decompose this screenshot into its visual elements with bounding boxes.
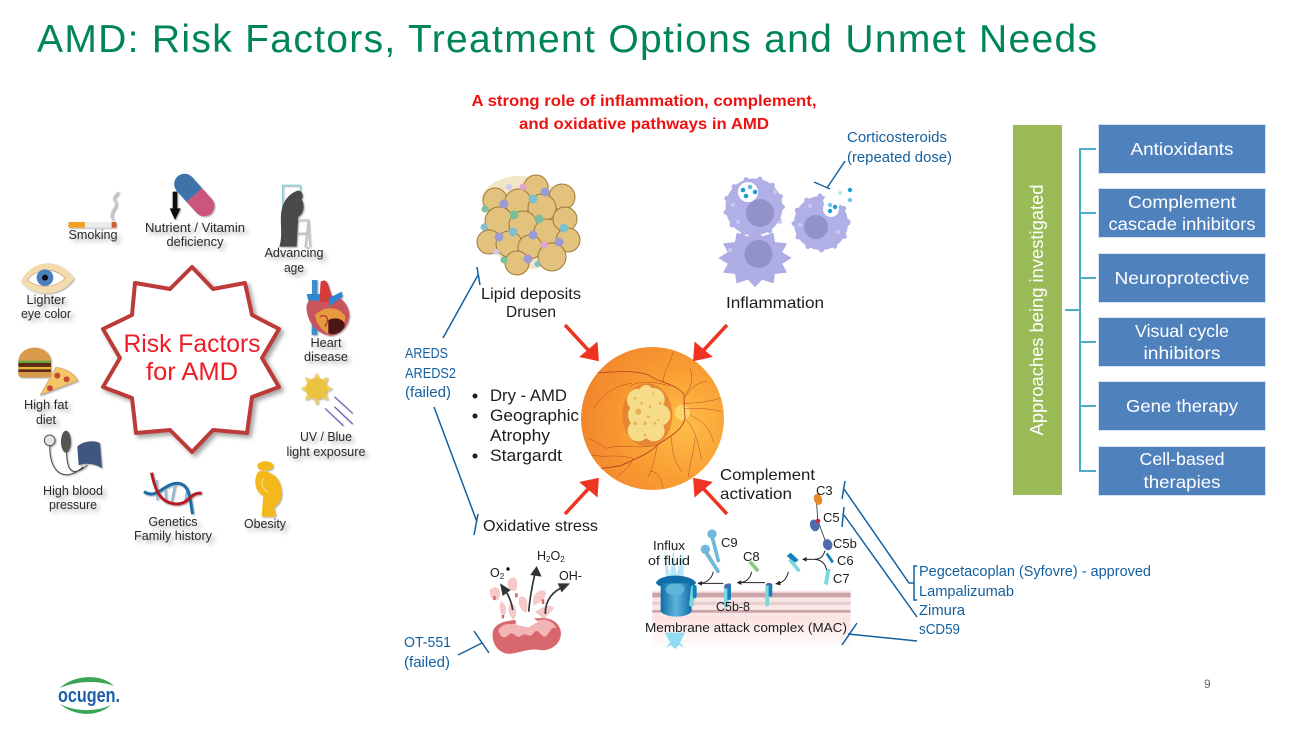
inhibitor lines: complement targets — [842, 481, 917, 645]
arrow: oxidative stress to retina — [565, 480, 597, 514]
arrow: drusen to retina — [565, 325, 597, 359]
label: complement therapies: sCD59 — [919, 622, 960, 638]
icon: cigarette — [68, 192, 118, 228]
label: smoking: Smoking — [68, 228, 118, 242]
arrow: inflammation to retina — [695, 325, 727, 359]
label: genetics family history: Genetics — [148, 515, 198, 529]
box: complement cascade inhibitors — [1098, 188, 1266, 238]
label: high blood pressure — [43, 484, 103, 512]
box: cell-based therapies — [1098, 446, 1266, 496]
inhibitor line: OT-551 — [458, 631, 489, 655]
label: complement activation: activation — [720, 486, 792, 503]
panel: central AMD pathway diagram — [404, 130, 1151, 671]
illustration: lipid drusen cluster — [477, 175, 580, 275]
label: corticosteroids: Corticosteroids — [847, 130, 947, 146]
label: high fat diet — [24, 398, 69, 427]
diagram: complement cascade and membrane attack complex: C5b-8 — [716, 599, 750, 614]
label: reactive oxygen species: 2 — [500, 572, 505, 581]
label: lipid deposits drusen — [481, 286, 581, 321]
heading bar: approaches — [1013, 125, 1062, 495]
heading bar: approaches: Approaches being investigated — [1027, 185, 1047, 435]
box: visual cycle inhibitors — [1098, 318, 1266, 366]
diagram: complement cascade and membrane attack complex: of fluid — [648, 553, 690, 568]
icon: elderly person with walker — [279, 185, 310, 247]
icon: eye — [21, 263, 74, 293]
label: oxidative stress: Oxidative stress — [483, 518, 598, 535]
label: genetics family history — [134, 515, 213, 543]
bullet list: conditions: Stargardt — [490, 446, 562, 465]
label: lighter eye color: eye color — [21, 307, 71, 321]
label: high fat diet: High fat — [24, 398, 69, 412]
label: advancing age: Advancing — [264, 246, 324, 260]
logo: ocugen — [58, 677, 120, 714]
label: heart disease — [304, 336, 348, 364]
bullet list: conditions: Geographic — [490, 406, 580, 425]
diagram: complement cascade and membrane attack complex: C5b — [833, 536, 857, 551]
label: reactive oxygen species — [490, 549, 582, 583]
inhibitor line: corticosteroids — [814, 161, 845, 189]
label: advancing age — [264, 246, 324, 275]
panel: risk factors for AMD — [18, 170, 366, 543]
subtitle: role of inflammation — [472, 93, 816, 133]
subtitle: role of inflammation: A strong role of inflammation, complement, — [472, 93, 816, 110]
box: visual cycle inhibitors: Visual cycle — [1135, 321, 1229, 341]
box: visual cycle inhibitors: inhibitors — [1144, 343, 1221, 363]
label: heart disease: disease — [304, 350, 348, 364]
diagram: complement cascade and membrane attack complex: C3 — [816, 483, 833, 498]
label: UV / blue light exposure — [286, 430, 366, 459]
arrow: complement to retina — [695, 480, 727, 514]
diagram: complement cascade and membrane attack complex: Influx — [653, 538, 686, 553]
box: neuroprotective — [1098, 254, 1266, 302]
connector bracket — [1065, 149, 1096, 471]
label: high fat diet: diet — [36, 413, 57, 427]
label: high blood pressure: pressure — [49, 498, 97, 512]
diagram: complement cascade and membrane attack complex: C9 — [721, 535, 738, 550]
label: reactive oxygen species: O — [550, 549, 560, 563]
diagram: complement cascade and membrane attack complex: C6 — [837, 553, 854, 568]
label: UV / blue light exposure: light exposure — [286, 445, 366, 459]
box: antioxidants: Antioxidants — [1130, 139, 1234, 159]
logo: ocugen: ocugen. — [58, 685, 120, 707]
label: high blood pressure: High blood — [43, 484, 103, 498]
label: complement therapies: Lampalizumab — [919, 584, 1014, 600]
label: reactive oxygen species: 2 — [546, 555, 551, 564]
inhibitor line: AREDS to drusen — [443, 267, 480, 338]
label: nutrient deficiency: Nutrient / Vitamin — [145, 221, 245, 235]
title: AMD: Risk Factors, Treatment Options and Unmet Needs — [37, 18, 1097, 61]
label: complement therapies — [919, 564, 1151, 638]
label: complement activation — [720, 467, 816, 503]
label: lipid deposits drusen: Lipid deposits — [481, 286, 581, 303]
icon: obese figure — [255, 461, 282, 517]
label: reactive oxygen species: H — [537, 549, 546, 563]
label: complement activation: Complement — [720, 467, 816, 484]
label: complement therapies: Zimura — [919, 603, 966, 619]
inhibitor line: AREDS to oxidative stress — [434, 407, 478, 535]
label: advancing age: age — [284, 261, 304, 275]
box: neuroprotective: Neuroprotective — [1114, 268, 1250, 288]
diagram: complement cascade and membrane attack complex: C5 — [823, 510, 840, 525]
diagram: complement cascade and membrane attack complex: C8 — [743, 549, 760, 564]
icon: DNA helix — [144, 473, 202, 514]
label: OT-551: (failed) — [404, 655, 450, 671]
star badge: Risk Factors — [124, 330, 260, 358]
star badge — [103, 267, 279, 452]
box: complement cascade inhibitors: Complement — [1128, 192, 1236, 212]
bullet list: conditions: Dry - AMD — [490, 386, 567, 405]
box: cell-based therapies: therapies — [1144, 472, 1221, 492]
label: AREDS treatments: AREDS — [405, 346, 448, 362]
star badge: for AMD — [146, 358, 238, 386]
illustration: retina fundus — [581, 347, 724, 490]
label: genetics family history: Family history — [134, 529, 213, 543]
box: gene therapy — [1098, 382, 1266, 430]
label: corticosteroids — [847, 130, 952, 166]
label: UV / blue light exposure: UV / Blue — [300, 430, 352, 444]
bullet list: conditions: Atrophy — [490, 426, 551, 445]
bullet list: conditions — [472, 386, 580, 465]
label: nutrient deficiency — [145, 221, 245, 249]
label: complement therapies: Pegcetacoplan (Syfovre) - approved — [919, 564, 1151, 580]
panel: approaches being investigated — [1013, 124, 1266, 496]
illustration: mitochondrion with reactive oxygen species — [489, 566, 570, 654]
label: AREDS treatments: (failed) — [405, 385, 451, 401]
label: reactive oxygen species: OH- — [559, 569, 582, 583]
label: lighter eye color — [21, 293, 71, 321]
page number: 9 — [1204, 677, 1211, 691]
label: OT-551: OT-551 — [404, 635, 451, 651]
label: nutrient deficiency: deficiency — [166, 235, 224, 249]
diagram: complement cascade and membrane attack complex: Membrane attack complex (MAC) — [645, 620, 847, 635]
icon: sun with light rays — [301, 373, 353, 426]
diagram: complement cascade and membrane attack complex — [645, 483, 857, 649]
illustration: inflammatory macrophage cells — [719, 178, 852, 287]
icon: heart — [306, 280, 349, 336]
label: corticosteroids: (repeated dose) — [847, 150, 952, 166]
icon: capsule and down arrow — [170, 170, 219, 220]
icon: burger and pizza — [18, 348, 78, 395]
label: lipid deposits drusen: Drusen — [506, 304, 556, 321]
label: obesity: Obesity — [244, 517, 287, 531]
diagram: complement cascade and membrane attack complex: C7 — [833, 571, 850, 586]
label: reactive oxygen species: O — [490, 566, 500, 580]
label: heart disease: Heart — [310, 336, 342, 350]
label: AREDS treatments: AREDS2 — [405, 366, 456, 382]
label: AREDS treatments — [405, 346, 456, 401]
subtitle: role of inflammation: and oxidative pathways in AMD — [519, 116, 769, 133]
label: lighter eye color: Lighter — [26, 293, 66, 307]
label: OT-551 — [404, 635, 451, 671]
label: reactive oxygen species: 2 — [560, 555, 565, 564]
label: inflammation: Inflammation — [726, 295, 824, 312]
box: antioxidants — [1098, 124, 1266, 174]
box: gene therapy: Gene therapy — [1126, 396, 1238, 416]
box: complement cascade inhibitors: cascade inhibitors — [1108, 214, 1256, 234]
icon: blood pressure cuff — [44, 431, 102, 475]
box: cell-based therapies: Cell-based — [1140, 449, 1224, 469]
